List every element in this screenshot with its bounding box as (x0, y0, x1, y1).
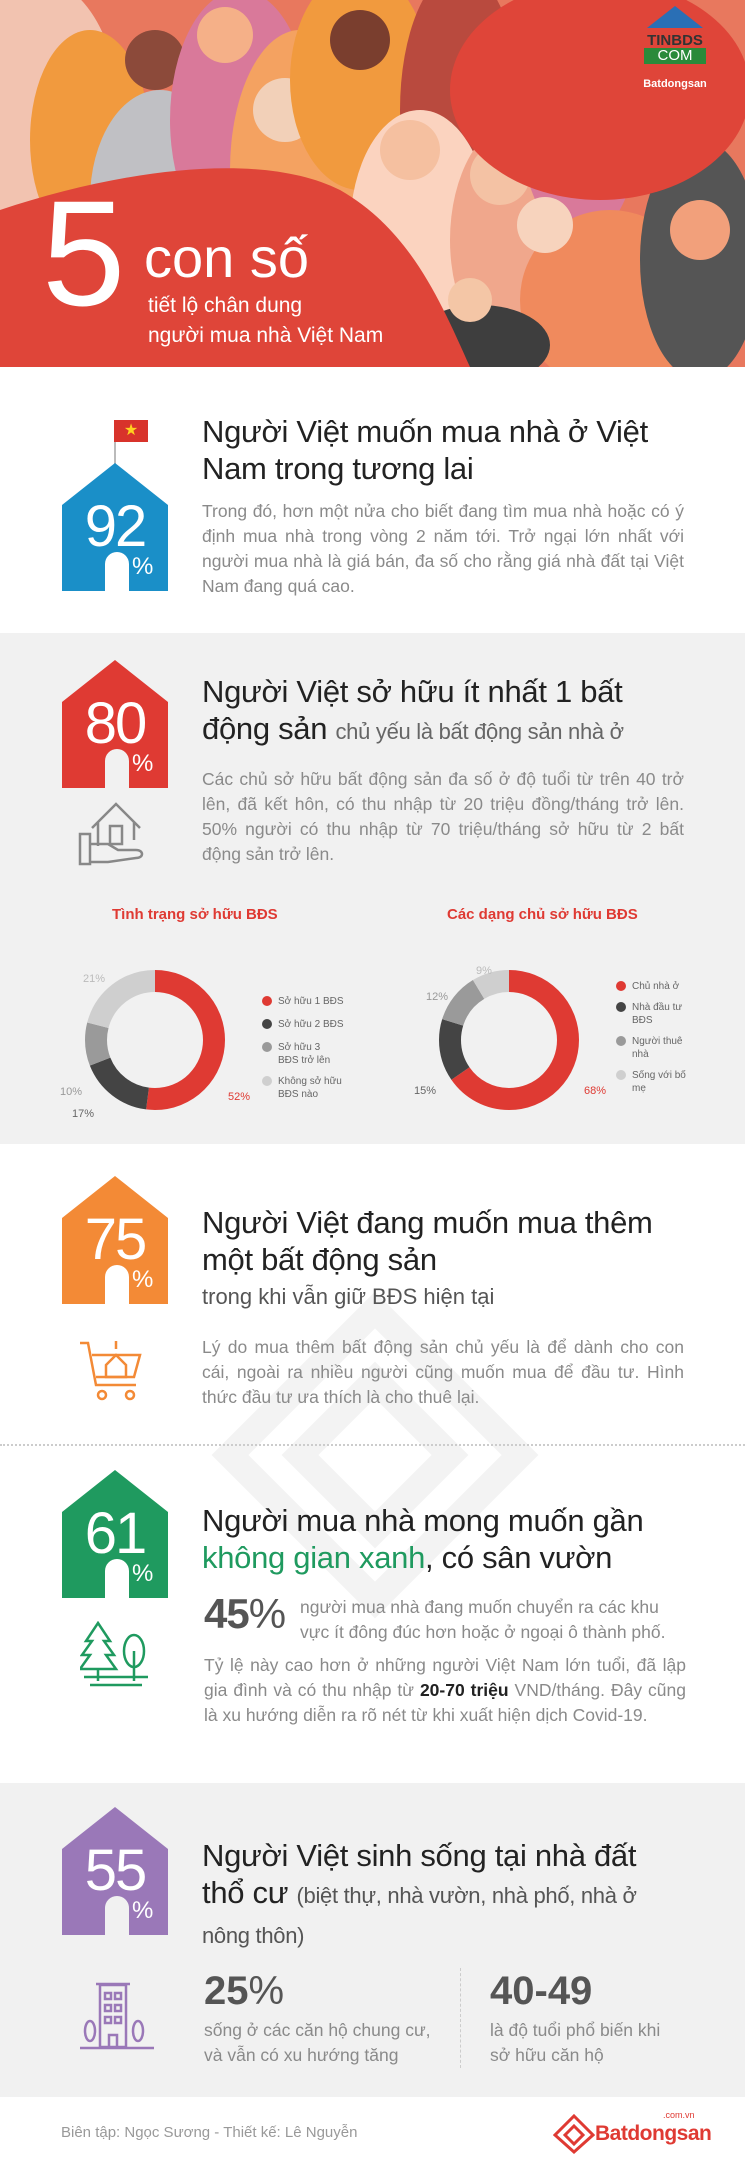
chart: cac dang chu so huu: 15% (414, 1085, 436, 1097)
chart: cac dang chu so huu: 12% (426, 991, 448, 1003)
heading: Người Việt đang muốn mua thêm một bất động sản (202, 1205, 653, 1277)
dotted divider (0, 1444, 745, 1446)
stat 25%: 25% (204, 1969, 284, 2013)
legend left: Sở hữu 1 BĐS (278, 996, 344, 1007)
house 55% (62, 1807, 168, 1935)
house 75% (62, 1176, 168, 1304)
title (42, 169, 383, 347)
chart: tinh trang so huu: Tình trạng sở hữu BĐS (112, 906, 278, 923)
section 4: 61% (62, 1470, 686, 1725)
chart: tinh trang so huu: 17% (72, 1108, 94, 1120)
legend left: Sở hữu 3 BĐS trở lên (278, 1042, 330, 1066)
logo: TINBDS / Batdongsan: TINBDS (647, 32, 703, 49)
dashed divider (460, 1968, 461, 2068)
title: tiết lộ chân dung (148, 294, 302, 317)
stat 25%: sống ở các căn hộ chung cư, (204, 2020, 431, 2040)
section 4: 61%: người mua nhà đang muốn chuyển ra các khu vực ít đông đúc hơn hoặc ở ngoại ô thành phố. (300, 1597, 665, 1642)
house 55%: 55 (85, 1838, 145, 1903)
chart: tinh trang so huu: 10% (60, 1086, 82, 1098)
body: Tỷ lệ này cao hơn ở những người Việt Nam lớn tuổi, đã lập gia đình và có thu nhập từ 20-70 triệu VND/tháng. Đây cũng là xu hướng diễn ra rõ nét từ khi xuất hiện dịch Covid-19. (204, 1655, 686, 1725)
chart: cac dang chu so huu (414, 906, 638, 1110)
house 61%: % (132, 1560, 153, 1587)
title: 5 (42, 169, 125, 337)
house 80%: 80 (85, 691, 145, 756)
legend right: Sống với bố mẹ (632, 1070, 686, 1094)
footer logo: Batdongsan (553, 2110, 711, 2154)
house 61%: 61 (85, 1501, 145, 1566)
chart: cac dang chu so huu: 68% (584, 1085, 606, 1097)
body: Lý do mua thêm bất động sản chủ yếu là để dành cho con cái, ngoài ra nhiều người cũng muốn mua để đầu tư. Hình thức đầu tư ưa thích là cho thuê lại. (202, 1337, 684, 1407)
hero banner (0, 0, 745, 367)
heading: Người mua nhà mong muốn gần không gian xanh, có sân vườn (202, 1503, 643, 1575)
chart: tinh trang so huu: 52% (228, 1091, 250, 1103)
legend right: Người thuê nhà (632, 1036, 682, 1060)
house 80%: % (132, 750, 153, 777)
subheading: trong khi vẫn giữ BĐS hiện tại (202, 1284, 494, 1309)
stat 45%: 45% (204, 1590, 285, 1637)
icon: flag: ★ (124, 422, 138, 439)
stat 40-49: 40-49 (490, 1969, 592, 2013)
section 3: 75% (62, 1176, 684, 1407)
logo: TINBDS / Batdongsan: COM (658, 47, 692, 64)
icon: apartment building (80, 1982, 154, 2050)
house 80% (62, 660, 168, 788)
stat 25% (204, 1969, 431, 2065)
stat 40-49: là độ tuổi phổ biến khi (490, 2020, 660, 2040)
legend right (616, 981, 686, 1094)
icon: trees (80, 1621, 148, 1686)
heading: Người Việt muốn mua nhà ở Việt Nam trong tương lai (202, 414, 648, 486)
icon: cart with house (80, 1341, 142, 1400)
heading: Người Việt sở hữu ít nhất 1 bất động sản chủ yếu là bất động sản nhà ở (202, 674, 624, 746)
legend right: Chủ nhà ở (632, 981, 679, 992)
footer logo: Batdongsan: .com.vn (663, 2110, 695, 2120)
stat 40-49: sở hữu căn hộ (490, 2045, 604, 2065)
logo: TINBDS / Batdongsan (643, 6, 707, 90)
logo: TINBDS / Batdongsan: Batdongsan (643, 78, 707, 90)
body: Trong đó, hơn một nửa cho biết đang tìm mua nhà hoặc có ý định mua nhà trong vòng 2 năm tới. Trở ngại lớn nhất với người mua nhà là giá bán, đa số cho rằng giá nhà đất tại Việt Nam đang quá cao. (202, 501, 684, 596)
footer logo: Batdongsan: Batdongsan (595, 2122, 711, 2145)
house 75%: 75 (85, 1207, 145, 1272)
stat 25%: và vẫn có xu hướng tăng (204, 2045, 398, 2065)
legend left (262, 996, 344, 1100)
house 92% (62, 463, 168, 591)
body: Các chủ sở hữu bất động sản đa số ở độ tuổi từ trên 40 trở lên, đã kết hôn, có thu nhập từ 20 triệu đồng/tháng trở lên. 50% người có thu nhập từ 70 triệu/tháng sở hữu từ 2 bất động sản trở lên. (202, 769, 684, 864)
legend left: Không sở hữu BĐS nào (278, 1076, 342, 1100)
section 5: 55% (0, 1783, 745, 2097)
title: con số (144, 226, 309, 289)
watermark logo (212, 1293, 538, 1618)
house 61% (62, 1470, 168, 1598)
chart: tinh trang so huu (60, 906, 278, 1120)
chart: tinh trang so huu: 21% (83, 973, 105, 985)
house 92%: % (132, 553, 153, 580)
section 1: 92% (0, 367, 745, 633)
chart: cac dang chu so huu: Các dạng chủ sở hữu BĐS (447, 906, 638, 923)
legend left: Sở hữu 2 BĐS (278, 1019, 344, 1030)
house 92%: 92 (85, 494, 145, 559)
heading: Người Việt sinh sống tại nhà đất thổ cư (biệt thự, nhà vườn, nhà phố, nhà ở nông thôn) (202, 1838, 637, 1948)
icon: house in hand (78, 802, 144, 866)
footer credits: Biên tập: Ngọc Sương - Thiết kế: Lê Nguyễn (61, 2124, 357, 2141)
house 75%: % (132, 1266, 153, 1293)
hero banner: người mua nhà Việt Nam (148, 324, 383, 347)
legend right: Nhà đầu tư BĐS (632, 1002, 682, 1026)
illustration: crowd of people (0, 0, 745, 367)
stat 40-49 (490, 1969, 660, 2065)
house 55%: % (132, 1897, 153, 1924)
section 2: 80% (0, 633, 745, 1144)
